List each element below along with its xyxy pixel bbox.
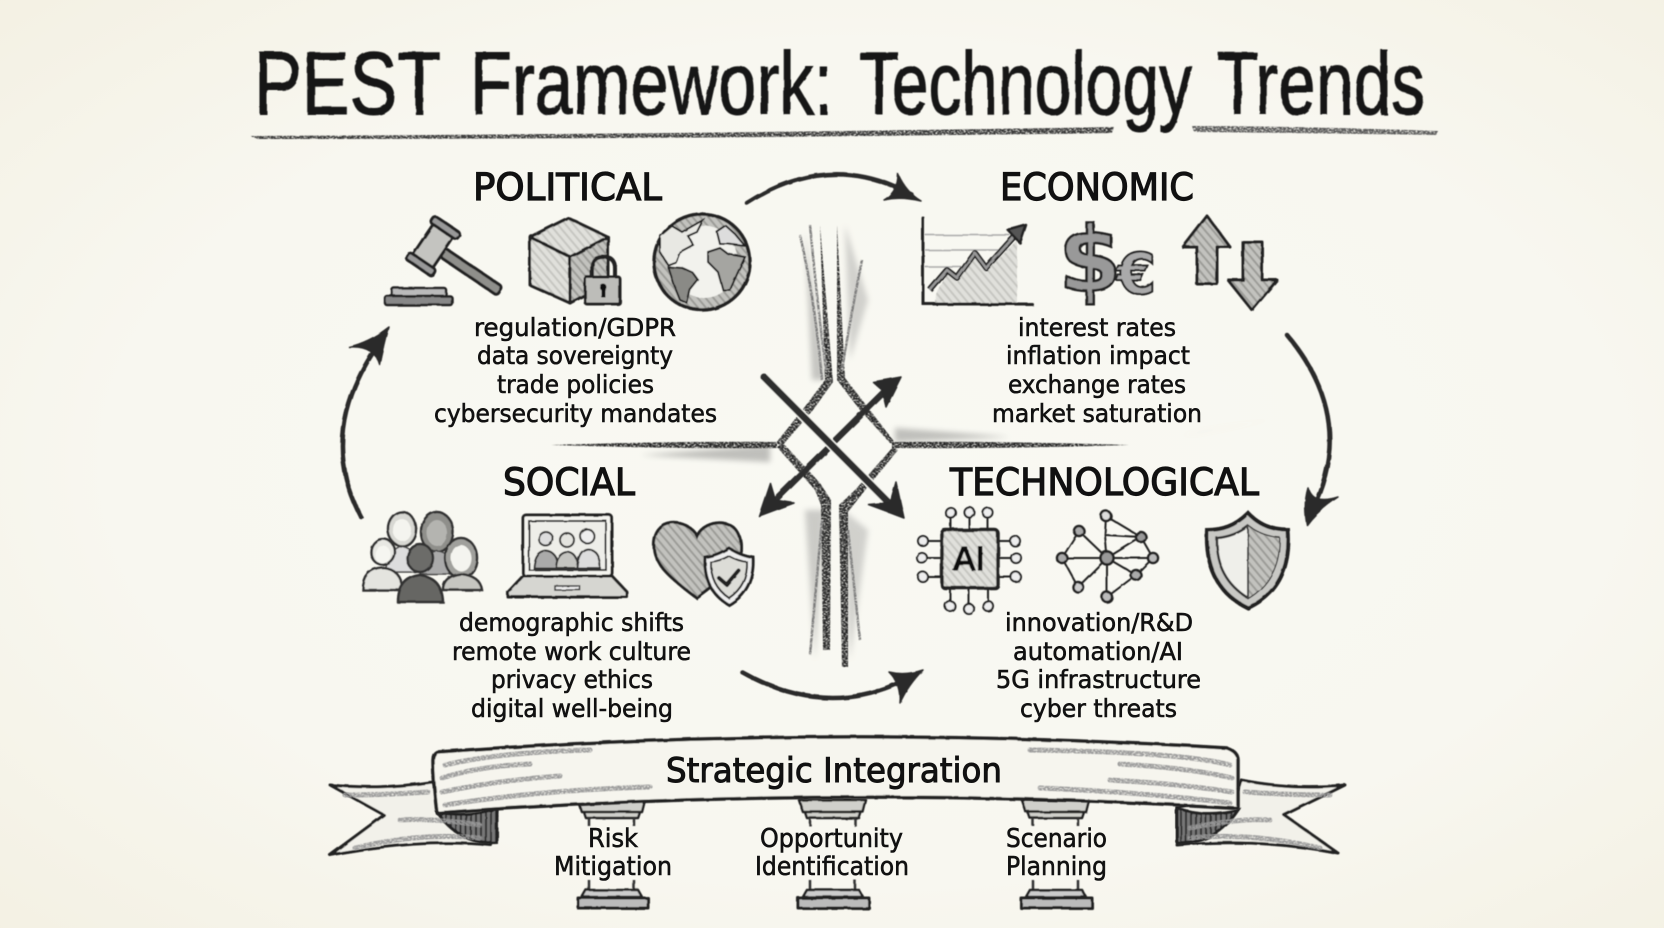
ribbon folds (437, 808, 1238, 843)
pillar labels: Planning (1006, 852, 1107, 882)
factors: technological: 5G infrastructure (996, 665, 1201, 694)
pillar labels: Mitigation (554, 852, 672, 882)
pillar labels: Scenario (1006, 824, 1107, 854)
panel: economic (923, 166, 1277, 428)
ribbon banner (330, 737, 1345, 855)
pillar labels: Identification (755, 852, 909, 882)
heading: economic: ECONOMIC (1000, 166, 1194, 209)
banner text: Strategic Integration (666, 751, 1002, 791)
pillar: risk mitigation (578, 800, 648, 908)
icon: dollar and euro: € (1115, 242, 1155, 307)
cycle arrow: economic to technological (1287, 335, 1338, 525)
pillar labels: Opportunity (760, 824, 903, 854)
factors: economic: interest rates (1018, 313, 1176, 342)
pillars (578, 800, 1092, 908)
icon: laptop video call (508, 515, 627, 597)
double-headed diagonal arrow (759, 377, 901, 516)
factors: economic: market saturation (992, 399, 1202, 428)
icon: up and down arrows (1183, 216, 1277, 310)
icon: globe (654, 214, 750, 310)
icon: network graph (1057, 511, 1158, 602)
diagonal arrow to technological (764, 377, 904, 518)
factors: economic: inflation impact (1006, 341, 1190, 370)
icon: AI chip (917, 507, 1021, 614)
factors: political: data sovereignty (477, 341, 673, 370)
factors: social: remote work culture (452, 637, 691, 666)
factors: political: regulation/GDPR (474, 313, 676, 342)
title: Trends (1217, 33, 1425, 133)
panel: technological (917, 461, 1288, 723)
factors: economic (992, 313, 1202, 428)
panel: social (363, 461, 753, 723)
factors: political: cybersecurity mandates (434, 399, 717, 428)
title underline (250, 126, 1438, 139)
icon: heart with shield (654, 523, 753, 605)
title: Framework: (470, 33, 833, 133)
title: PEST (254, 33, 441, 133)
pillar: opportunity identification (798, 800, 869, 908)
icon: dollar and euro: $ (1059, 208, 1121, 313)
factors: social (452, 608, 691, 723)
factors: social: privacy ethics (491, 665, 653, 694)
factors: economic: exchange rates (1008, 370, 1186, 399)
cycle arrow: social to technological (742, 670, 923, 703)
cycle arrow: social to political (342, 327, 389, 517)
icon: security shield (1207, 513, 1288, 608)
heading: social: SOCIAL (503, 461, 635, 504)
ribbon shading streaks (345, 750, 1330, 848)
ribbon band (433, 737, 1238, 813)
panel: political (385, 166, 750, 428)
heading: political: POLITICAL (473, 166, 662, 209)
icon: gavel (385, 215, 514, 312)
pillar: scenario planning (1021, 800, 1092, 908)
factors: technological: automation/AI (1013, 637, 1183, 666)
icon: AI chip: AI (953, 540, 985, 578)
factors: technological (996, 608, 1201, 723)
icon: dollar and euro (1059, 208, 1155, 313)
central crossroads divider (551, 225, 1280, 667)
factors: social: digital well-being (471, 694, 673, 723)
cycle arrow: political to economic (747, 174, 921, 203)
factors: political: trade policies (497, 370, 654, 399)
factors: social: demographic shifts (459, 608, 684, 637)
factors: political (434, 313, 717, 428)
ribbon right tail (1177, 780, 1345, 853)
pillar labels (554, 824, 1107, 882)
factors: technological: innovation/R&D (1005, 608, 1193, 637)
icon: growth chart (923, 218, 1032, 304)
factors: technological: cyber threats (1020, 694, 1177, 723)
icon: locked data cube (530, 218, 620, 304)
icon: group of people (363, 512, 482, 602)
heading: technological: TECHNOLOGICAL (949, 461, 1259, 504)
title: Technology (859, 33, 1192, 133)
pillar labels: Risk (588, 824, 638, 854)
title (254, 33, 1425, 133)
ribbon left tail (330, 782, 497, 855)
